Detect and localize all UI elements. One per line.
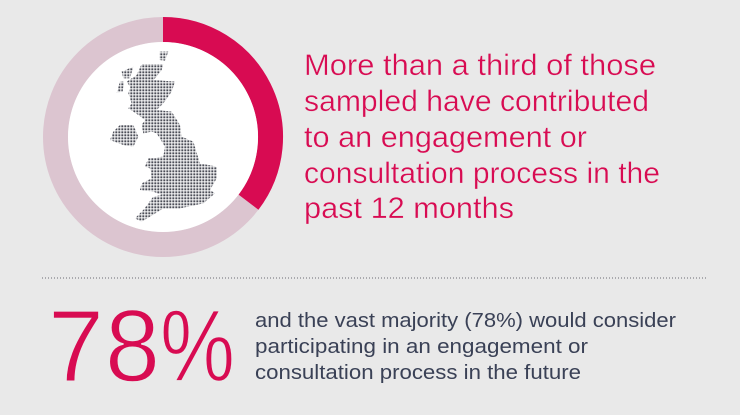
headline text: past 12 months (304, 192, 514, 225)
big statistic: 78%: % (160, 289, 235, 403)
supporting text: consultation process in the future (255, 362, 581, 384)
supporting text: participating in an engagement or (255, 336, 588, 358)
headline text: sampled have contributed (304, 85, 649, 118)
big statistic: 78% (48, 289, 235, 403)
donut chart: more than a third (56, 29, 271, 244)
icon: dotted map of the UK (110, 52, 217, 222)
big statistic: 78%: 8 (105, 289, 160, 403)
headline text: to an engagement or (304, 121, 587, 154)
big statistic: 78%: 7 (48, 289, 104, 403)
headline text (304, 49, 660, 225)
headline text: consultation process in the (304, 157, 660, 190)
headline text: More than a third of those (304, 49, 656, 82)
supporting text: and the vast majority (78%) would consider (255, 310, 676, 332)
supporting text (255, 310, 676, 384)
